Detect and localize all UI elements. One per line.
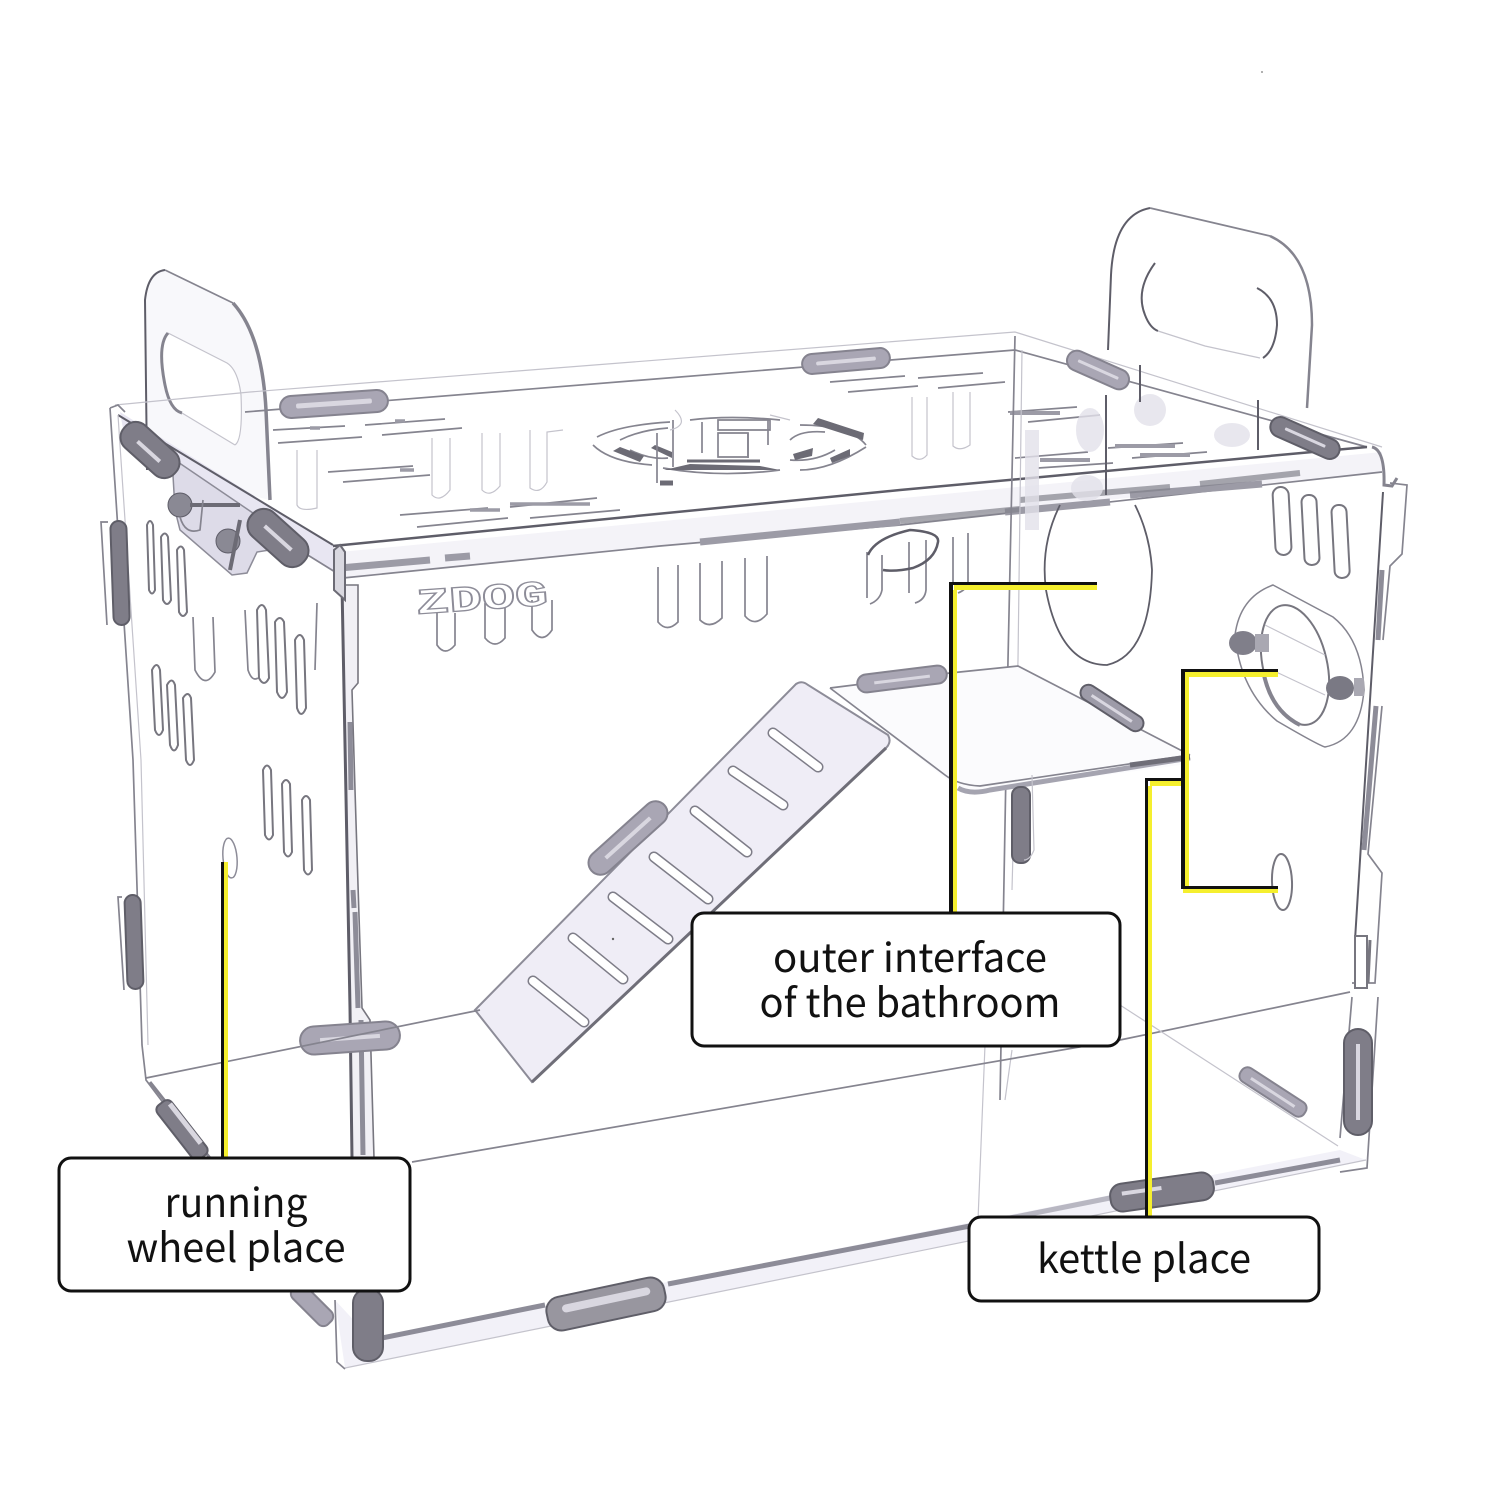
callout: running wheel place [59, 1158, 410, 1291]
top panel [115, 332, 1382, 578]
front handle [145, 270, 270, 500]
top panel fan vent [593, 410, 866, 483]
ramp [475, 682, 890, 1082]
callout: running wheel place: wheel place [126, 1216, 346, 1274]
ramp slots [533, 733, 818, 1022]
callout: kettle place [969, 1217, 1319, 1301]
ZDOG logo: ZDOG [415, 575, 549, 625]
left bracket with bolts [168, 458, 300, 575]
left panel slots [147, 521, 317, 874]
back handle [1108, 208, 1312, 408]
left panel outline [110, 405, 210, 1158]
bottom tabs [288, 1029, 1372, 1361]
back vertical edge [978, 336, 1022, 1220]
left panel wheel hole [221, 837, 239, 879]
back panel residue marks [1025, 365, 1258, 530]
right lower oval hole [1271, 854, 1293, 910]
callout: outer interface of the bathroom [692, 913, 1120, 1046]
ramp tab [584, 796, 672, 880]
front panel slots [437, 530, 968, 651]
top panel slots [273, 373, 1207, 527]
bottom strip [335, 1150, 1366, 1369]
right panel outline [1340, 447, 1407, 1172]
right porthole [1235, 585, 1364, 747]
leader line: kettle place [1145, 669, 1278, 1218]
leader line: running wheel place [221, 862, 228, 1158]
mid shelf [830, 666, 1190, 792]
callout: running wheel place: running [164, 1171, 308, 1229]
front corner tab strip [334, 545, 374, 1158]
porthole bolts [1229, 631, 1364, 700]
floor lines [146, 992, 1350, 1162]
right panel slots [1272, 487, 1350, 578]
callout: outer interface of the bathroom: outer interface [773, 926, 1047, 984]
top panel tabs [115, 347, 1343, 573]
specks [612, 71, 1263, 940]
callout: outer interface of the bathroom: of the bathroom [760, 971, 1060, 1029]
back round hole [1045, 505, 1152, 665]
leader line: outer interface of the bathroom [949, 582, 1097, 913]
side panel tabs [101, 521, 401, 1162]
mid shelf tabs [856, 665, 1147, 863]
callout: kettle place: kettle place [1037, 1227, 1251, 1285]
